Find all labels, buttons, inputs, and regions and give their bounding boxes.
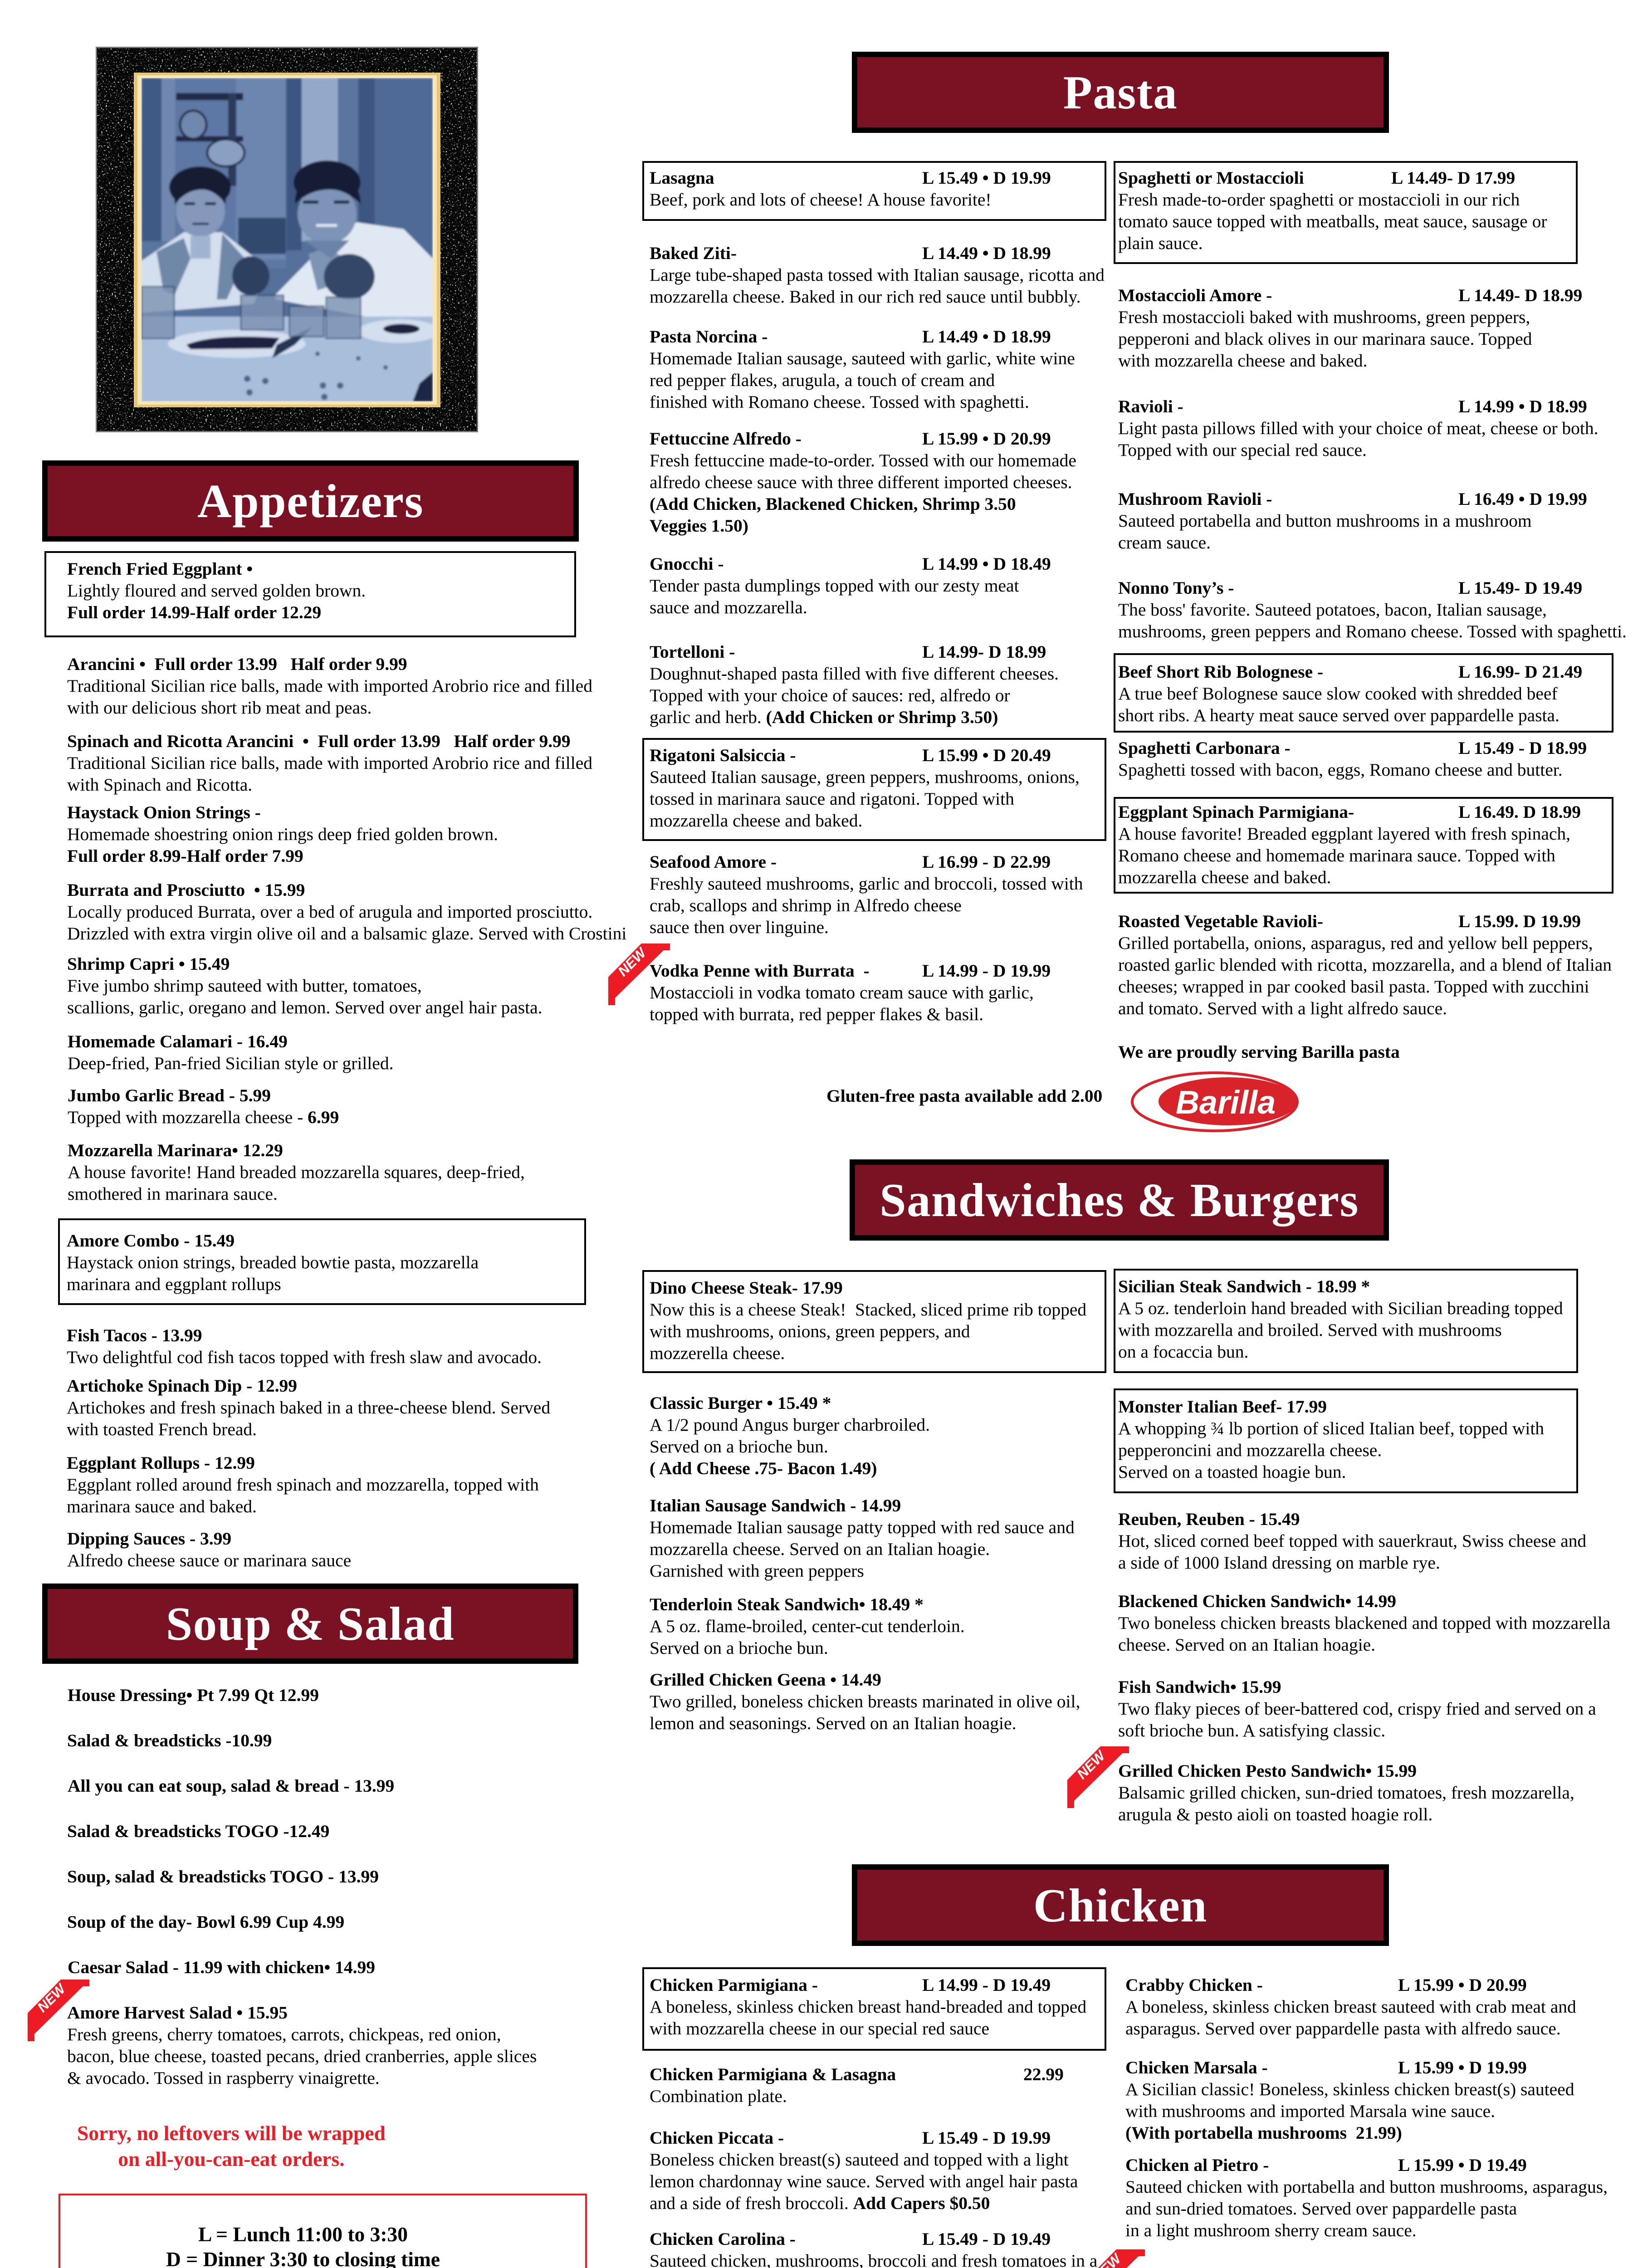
item: Amore Harvest Salad: bacon, blue cheese, toasted pecans, dried cranberries, apple slices — [67, 2046, 537, 2066]
item box: Amore Combo: Haystack onion strings, breaded bowtie pasta, mozzarella — [67, 1252, 479, 1272]
item: Grilled Chicken Pesto Sandwich: Balsamic grilled chicken, sun-dried tomatoes, fresh mozzarella, — [1118, 1783, 1574, 1803]
item box: Monster Italian Beef — [1114, 1388, 1578, 1493]
item: Chicken Piccata: Chicken Piccata - — [650, 2128, 784, 2148]
item box: Monster Italian Beef: Monster Italian Beef- 17.99 — [1118, 1397, 1327, 1417]
item: Chicken Carolina: L 15.49 - D 19.49 — [922, 2229, 1051, 2249]
item box: Eggplant Spinach Parmigiana — [1114, 797, 1613, 894]
item: Fettuccine Alfredo: Fresh fettuccine made-to-order. Tossed with our homemade — [650, 450, 1076, 470]
heading: Soup & Salad — [42, 1584, 578, 1664]
item box: Dino Cheese Steak: with mushrooms, onions, green peppers, and — [650, 1321, 970, 1341]
item: Spaghetti Carbonara: Spaghetti tossed with bacon, eggs, Romano cheese and butter. — [1118, 760, 1563, 780]
item: Chicken al Pietro: and sun-dried tomatoes. Served over pappardelle pasta — [1125, 2199, 1517, 2219]
item: Chicken Piccata: lemon chardonnay wine sauce. Served with angel hair pasta — [650, 2171, 1078, 2191]
item: Vodka Penne with Burrata — [650, 960, 1034, 1025]
item: Haystack Onion Strings: Haystack Onion Strings - — [67, 802, 261, 822]
icon: NEW ribbon — [1067, 1746, 1129, 1808]
heading: Appetizers — [42, 460, 579, 542]
icon: NEW ribbon — [1083, 2249, 1145, 2268]
item: Burrata and Prosciutto: Drizzled with extra virgin olive oil and a balsamic glaze. Served with Crostini — [67, 924, 626, 943]
item: Dipping Sauces — [67, 1528, 351, 1571]
panel: appetizers — [41, 460, 631, 1576]
item: Chicken Carolina: Chicken Carolina - — [650, 2229, 796, 2249]
callout: no leftovers notice — [54, 2120, 408, 2172]
item: Gnocchi: L 14.99 • D 18.49 — [922, 554, 1051, 574]
item: Mozzarella Marinara: smothered in marinara sauce. — [68, 1184, 278, 1204]
item: Shrimp Capri: Five jumbo shrimp sauteed with butter, tomatoes, — [67, 976, 422, 996]
item: Tortelloni: garlic and herb. (Add Chicken or Shrimp 3.50) — [650, 707, 998, 727]
item box: Rigatoni Salsiccia — [642, 738, 1106, 841]
item: Fettuccine Alfredo: Veggies 1.50) — [650, 516, 748, 536]
item: Fettuccine Alfredo — [650, 428, 1076, 537]
item: Italian Sausage Sandwich — [650, 1495, 1075, 1582]
item: Amore Harvest Salad — [67, 2002, 537, 2089]
text: lunch and dinner times: L = Lunch 11:00 to 3:30 — [198, 2223, 408, 2246]
item: Jumbo Garlic Bread: Jumbo Garlic Bread - 5.99 — [68, 1085, 271, 1105]
item box: Rigatoni Salsiccia: L 15.99 • D 20.49 — [922, 745, 1051, 765]
item: Spinach and Ricotta Arancini: Spinach and Ricotta Arancini • Full order 13.99 Half order 9.99 — [67, 731, 571, 751]
heading: Pasta: Pasta — [1063, 66, 1178, 119]
item: Roasted Vegetable Ravioli: Roasted Vegetable Ravioli- — [1118, 911, 1323, 931]
item box: Lasagna: Lasagna — [650, 168, 714, 188]
item box: Eggplant Spinach Parmigiana: mozzarella cheese and baked. — [1118, 867, 1331, 887]
item box: Dino Cheese Steak — [642, 1270, 1106, 1373]
item: Fish Sandwich: soft brioche bun. A satisfying classic. — [1118, 1721, 1385, 1740]
item: Vodka Penne with Burrata: L 14.99 - D 19.99 — [922, 961, 1051, 981]
item box: Monster Italian Beef: A whopping ¾ lb portion of sliced Italian beef, topped with — [1118, 1418, 1544, 1438]
item box: Rigatoni Salsiccia: tossed in marinara sauce and rigatoni. Topped with — [650, 789, 1014, 809]
item: Mushroom Ravioli: L 16.49 • D 19.99 — [1458, 489, 1587, 509]
item: Crabby Chicken: A boneless, skinless chicken breast sauteed with crab meat and — [1125, 1997, 1576, 2017]
item: Roasted Vegetable Ravioli: roasted garlic blended with ricotta, mozzarella, and a blend of Italian — [1118, 955, 1612, 975]
item: Eggplant Rollups: Eggplant Rollups - 12.99 — [67, 1453, 255, 1473]
item: Chicken Marsala: L 15.99 • D 19.99 — [1398, 2058, 1527, 2077]
item: Nonno Tony's: mushrooms, green peppers and Romano cheese. Tossed with spaghetti. — [1118, 621, 1627, 641]
item box: Spaghetti or Mostaccioli: Fresh made-to-order spaghetti or mostaccioli in our rich — [1118, 190, 1520, 210]
item: Blackened Chicken Sandwich: Blackened Chicken Sandwich• 14.99 — [1118, 1591, 1396, 1611]
item: Mostaccioli Amore: pepperoni and black olives in our marinara sauce. Topped — [1118, 329, 1532, 349]
item: Grilled Chicken Geena: lemon and seasonings. Served on an Italian hoagie. — [650, 1713, 1016, 1733]
item: Jumbo Garlic Bread — [68, 1085, 339, 1128]
item: Arancini — [67, 653, 592, 719]
item: Fish Sandwich: Fish Sandwich• 15.99 — [1118, 1677, 1281, 1697]
item: Spinach and Ricotta Arancini — [67, 730, 592, 796]
item box: Amore Combo — [58, 1218, 586, 1305]
item: Jumbo Garlic Bread: Topped with mozzarella cheese - 6.99 — [68, 1107, 339, 1127]
item: Crabby Chicken: L 15.99 • D 20.99 — [1398, 1975, 1527, 1995]
item: Tortelloni: Tortelloni - — [650, 642, 735, 662]
item: Chicken Piccata — [650, 2127, 1078, 2214]
item: Mostaccioli Amore: Fresh mostaccioli baked with mushrooms, green peppers, — [1118, 307, 1530, 327]
item box: Eggplant Spinach Parmigiana: L 16.49. D 18.99 — [1458, 802, 1581, 822]
item: Seafood Amore — [650, 851, 1083, 938]
item: Roasted Vegetable Ravioli: and tomato. Served with a light alfredo sauce. — [1118, 998, 1447, 1018]
item: Pasta Norcina: finished with Romano cheese. Tossed with spaghetti. — [650, 392, 1029, 412]
callout: no leftovers notice: Sorry, no leftovers will be wrapped — [77, 2121, 386, 2145]
item: Spaghetti Carbonara: L 15.49 - D 18.99 — [1458, 738, 1587, 758]
item: Tenderloin Steak Sandwich — [650, 1593, 965, 1659]
item: Blackened Chicken Sandwich — [1118, 1590, 1610, 1656]
item: Burrata and Prosciutto — [67, 879, 626, 944]
icon: NEW ribbon — [608, 943, 670, 1005]
item: Mushroom Ravioli: Mushroom Ravioli - — [1118, 489, 1272, 509]
item: Fettuccine Alfredo: alfredo cheese sauce with three different imported cheeses. — [650, 472, 1072, 492]
item box: Beef Short Rib Bolognese: short ribs. A hearty meat sauce served over pappardelle pasta. — [1118, 705, 1560, 725]
item: Tortelloni: Doughnut-shaped pasta filled with five different cheeses. — [650, 664, 1059, 684]
heading: Sandwiches & Burgers: Sandwiches & Burgers — [880, 1173, 1359, 1227]
item: Vodka Penne with Burrata: Mostaccioli in vodka tomato cream sauce with garlic, — [650, 982, 1034, 1002]
item: Blackened Chicken Sandwich: cheese. Served on an Italian hoagie. — [1118, 1635, 1375, 1655]
item: Fettuccine Alfredo: L 15.99 • D 20.99 — [922, 429, 1051, 449]
item: Mostaccioli Amore: with mozzarella cheese and baked. — [1118, 351, 1367, 371]
item: Mushroom Ravioli: Sauteed portabella and button mushrooms in a mushroom — [1118, 511, 1532, 531]
item box: Eggplant Spinach Parmigiana: Romano cheese and homemade marinara sauce. Topped with — [1118, 846, 1555, 865]
item: Mozzarella Marinara: Mozzarella Marinara• 12.29 — [68, 1140, 283, 1160]
item: Homemade Calamari — [68, 1031, 393, 1074]
item: Tortelloni: Topped with your choice of sauces: red, alfredo or — [650, 685, 1010, 705]
item box: Spaghetti or Mostaccioli: tomato sauce topped with meatballs, meat sauce, sausage or — [1118, 211, 1547, 231]
item: Pasta Norcina — [650, 326, 1075, 413]
item: Fish Tacos: Two delightful cod fish tacos topped with fresh slaw and avocado. — [67, 1347, 542, 1367]
item: Fish Tacos — [67, 1325, 542, 1368]
item: Chicken Piccata: L 15.49 - D 19.99 — [922, 2128, 1051, 2148]
item: Mushroom Ravioli: cream sauce. — [1118, 533, 1211, 552]
item: Amore Harvest Salad: Fresh greens, cherry tomatoes, carrots, chickpeas, red onion, — [67, 2024, 501, 2044]
item: Italian Sausage Sandwich: mozzarella cheese. Served on an Italian hoagie. — [650, 1539, 990, 1559]
item: Nonno Tony's: Nonno Tony’s - — [1118, 578, 1234, 598]
item: Chicken al Pietro: in a light mushroom sherry cream sauce. — [1125, 2220, 1417, 2240]
item: Amore Harvest Salad: Amore Harvest Salad • 15.95 — [67, 2003, 288, 2023]
item: Fish Sandwich — [1118, 1676, 1596, 1741]
item: Seafood Amore: Seafood Amore - — [650, 852, 777, 872]
item: Soup salad breadsticks togo: Soup, salad & breadsticks TOGO - 13.99 — [67, 1867, 379, 1887]
item: Shrimp Capri: Shrimp Capri • 15.49 — [67, 954, 230, 974]
icon: Barilla logo: Barilla — [1176, 1085, 1276, 1121]
item: Grilled Chicken Geena: Grilled Chicken Geena • 14.49 — [650, 1670, 881, 1690]
item: House Dressing: House Dressing• Pt 7.99 Qt 12.99 — [68, 1685, 319, 1705]
item: Eggplant Rollups: marinara sauce and baked. — [67, 1496, 257, 1516]
item: Chicken Piccata: and a side of fresh broccoli. Add Capers $0.50 — [650, 2193, 990, 2213]
item: Mozzarella Marinara — [68, 1139, 525, 1205]
item box: Dino Cheese Steak: Now this is a cheese Steak! Stacked, sliced prime rib topped — [650, 1300, 1086, 1320]
item: Spinach and Ricotta Arancini: with Spinach and Ricotta. — [67, 775, 252, 795]
panel: hours — [59, 2194, 587, 2268]
item box: Sicilian Steak Sandwich — [1114, 1269, 1578, 1373]
item: Artichoke Spinach Dip: with toasted French bread. — [67, 1419, 257, 1439]
item: Salad and breadsticks: Salad & breadsticks -10.99 — [67, 1730, 272, 1750]
item: Salad and breadsticks togo: Salad & breadsticks TOGO -12.49 — [67, 1821, 329, 1841]
item box: Eggplant Spinach Parmigiana: A house favorite! Breaded eggplant layered with fresh spinach, — [1118, 824, 1570, 844]
item box: Rigatoni Salsiccia: Rigatoni Salsiccia - — [650, 745, 796, 765]
item box: Chicken Parmigiana: with mozzarella cheese in our special red sauce — [650, 2019, 989, 2038]
item: Seafood Amore: sauce then over linguine. — [650, 917, 829, 937]
item: Roasted Vegetable Ravioli: L 15.99. D 19.99 — [1458, 911, 1581, 931]
panel: sandwiches and burgers — [640, 1159, 1628, 1831]
icon: NEW ribbon: NEW — [615, 944, 650, 979]
item box: Amore Combo: marinara and eggplant rollups — [67, 1274, 281, 1294]
item: Caesar Salad: Caesar Salad - 11.99 with chicken• 14.99 — [68, 1957, 375, 1977]
item box: Sicilian Steak Sandwich: with mozzarella and broiled. Served with mushrooms — [1118, 1320, 1502, 1340]
item box: Sicilian Steak Sandwich: on a focaccia bun. — [1118, 1342, 1248, 1362]
item: Italian Sausage Sandwich: Italian Sausage Sandwich - 14.99 — [650, 1496, 901, 1515]
item: Nonno Tony's: L 15.49- D 19.49 — [1458, 578, 1582, 598]
item: Homemade Calamari: Deep-fried, Pan-fried Sicilian style or grilled. — [68, 1053, 393, 1073]
item: Haystack Onion Strings: Full order 8.99-Half order 7.99 — [67, 846, 303, 866]
item: Pasta Norcina: L 14.49 • D 18.99 — [922, 327, 1051, 347]
item: Crabby Chicken: Crabby Chicken - — [1125, 1975, 1263, 1995]
item: Reuben, Reuben: Hot, sliced corned beef topped with sauerkraut, Swiss cheese and — [1118, 1531, 1586, 1551]
item box: Dino Cheese Steak: Dino Cheese Steak- 17.99 — [650, 1278, 843, 1298]
item: Classic Burger: ( Add Cheese .75- Bacon 1.49) — [650, 1458, 877, 1478]
item box: Rigatoni Salsiccia: mozzarella cheese and baked. — [650, 811, 862, 831]
item: Gnocchi: Tender pasta dumplings topped with our zesty meat — [650, 576, 1019, 596]
item: Blackened Chicken Sandwich: Two boneless chicken breasts blackened and topped with mozzarella — [1118, 1613, 1610, 1633]
item: Grilled Chicken Geena — [650, 1669, 1080, 1734]
item: Arancini: with our delicious short rib meat and peas. — [67, 698, 372, 718]
item: Tenderloin Steak Sandwich: Served on a brioche bun. — [650, 1638, 828, 1658]
item: Tenderloin Steak Sandwich: A 5 oz. flame-broiled, center-cut tenderloin. — [650, 1616, 965, 1636]
item: Chicken Parmigiana and Lasagna: Chicken Parmigiana & Lasagna — [650, 2064, 896, 2084]
item: Ravioli: Light pasta pillows filled with your choice of meat, cheese or both. — [1118, 418, 1599, 438]
item: Chicken Piccata: Boneless chicken breast(s) sauteed and topped with a light — [650, 2150, 1069, 2170]
item: Dipping Sauces: Alfredo cheese sauce or marinara sauce — [67, 1550, 351, 1570]
item: Homemade Calamari: Homemade Calamari - 16.49 — [68, 1031, 288, 1051]
item: Haystack Onion Strings — [67, 802, 498, 867]
item: Reuben, Reuben — [1118, 1508, 1586, 1574]
item: Amore Harvest Salad: & avocado. Tossed in raspberry vinaigrette. — [67, 2068, 380, 2088]
item: Crabby Chicken: asparagus. Served over pappardelle pasta with alfredo sauce. — [1125, 2019, 1561, 2038]
item: Tortelloni — [650, 641, 1059, 728]
item: Chicken Marsala: A Sicilian classic! Boneless, skinless chicken breast(s) sauteed — [1125, 2079, 1574, 2099]
item: Chicken Marsala: (With portabella mushrooms 21.99) — [1125, 2123, 1402, 2143]
item: Grilled Chicken Pesto Sandwich: Grilled Chicken Pesto Sandwich• 15.99 — [1118, 1761, 1417, 1781]
item: Pasta Norcina: Pasta Norcina - — [650, 327, 768, 347]
heading: Chicken — [852, 1864, 1389, 1946]
item box: French Fried Eggplant: French Fried Eggplant • — [67, 559, 253, 579]
item box: Chicken Parmigiana — [642, 1967, 1106, 2051]
item: Chicken Marsala: with mushrooms and imported Marsala wine sauce. — [1125, 2101, 1495, 2121]
item: Crabby Chicken — [1125, 1974, 1576, 2039]
icon: NEW ribbon: NEW — [1074, 1747, 1109, 1782]
item: Dipping Sauces: Dipping Sauces - 3.99 — [67, 1529, 231, 1549]
item box: Spaghetti or Mostaccioli: L 14.49- D 17.99 — [1391, 168, 1515, 188]
item box: Eggplant Spinach Parmigiana: Eggplant Spinach Parmigiana- — [1118, 802, 1354, 822]
item: Gnocchi: Gnocchi - — [650, 554, 724, 574]
item box: Lasagna — [642, 161, 1106, 221]
item box: Sicilian Steak Sandwich: Sicilian Steak Sandwich - 18.99 * — [1118, 1276, 1370, 1296]
item box: Beef Short Rib Bolognese: A true beef Bolognese sauce slow cooked with shredded beef — [1118, 684, 1558, 704]
item: Baked Ziti: L 14.49 • D 18.99 — [922, 243, 1051, 263]
item: Arancini: Arancini • Full order 13.99 Half order 9.99 — [67, 654, 407, 674]
item: Roasted Vegetable Ravioli — [1118, 910, 1612, 1019]
item: Artichoke Spinach Dip: Artichokes and fresh spinach baked in a three-cheese blend. Served — [67, 1398, 550, 1418]
item: Grilled Chicken Pesto Sandwich: arugula & pesto aioli on toasted hoagie roll. — [1118, 1804, 1433, 1824]
icon: Barilla logo — [1130, 1071, 1299, 1133]
item: Reuben, Reuben: Reuben, Reuben - 15.49 — [1118, 1509, 1300, 1529]
item: Seafood Amore: L 16.99 - D 22.99 — [922, 852, 1051, 872]
item box: Sicilian Steak Sandwich: A 5 oz. tenderloin hand breaded with Sicilian breading topped — [1118, 1298, 1563, 1318]
item box: Amore Combo: Amore Combo - 15.49 — [67, 1231, 235, 1251]
item: Chicken Parmigiana and Lasagna: Combination plate. — [650, 2086, 787, 2106]
item: Chicken al Pietro: L 15.99 • D 19.49 — [1398, 2155, 1527, 2175]
item: Italian Sausage Sandwich: Garnished with green peppers — [650, 1561, 864, 1581]
item box: French Fried Eggplant — [44, 551, 576, 637]
item: Italian Sausage Sandwich: Homemade Italian sausage patty topped with red sauce and — [650, 1517, 1075, 1537]
item box: Chicken Parmigiana: Chicken Parmigiana - — [650, 1975, 818, 1995]
panel: pasta — [608, 52, 1633, 1140]
item: Vodka Penne with Burrata: Vodka Penne with Burrata - — [650, 961, 870, 981]
item: Gnocchi: sauce and mozzarella. — [650, 597, 807, 617]
item: Chicken al Pietro — [1125, 2154, 1608, 2241]
photo: framed vintage portrait of a couple at dinner — [96, 47, 478, 432]
item: Shrimp Capri: scallions, garlic, oregano and lemon. Served over angel hair pasta. — [67, 997, 542, 1017]
panel: chicken — [640, 1864, 1628, 2268]
item: Chicken al Pietro: Chicken al Pietro - — [1125, 2155, 1269, 2175]
item: Spaghetti Carbonara: Spaghetti Carbonara - — [1118, 738, 1291, 758]
item: Nonno Tony's — [1118, 577, 1627, 642]
item: Haystack Onion Strings: Homemade shoestring onion rings deep fried golden brown. — [67, 824, 498, 844]
item box: Monster Italian Beef: pepperoncini and mozzarella cheese. — [1118, 1440, 1382, 1460]
item: Gnocchi — [650, 553, 1019, 618]
item: Spinach and Ricotta Arancini: Traditional Sicilian rice balls, made with imported Arobrio rice and filled — [67, 753, 592, 773]
item: Tenderloin Steak Sandwich: Tenderloin Steak Sandwich• 18.49 * — [650, 1594, 924, 1614]
item box: Spaghetti or Mostaccioli: Spaghetti or Mostaccioli — [1118, 168, 1304, 188]
heading: Pasta — [852, 52, 1389, 133]
item box: French Fried Eggplant: Full order 14.99-Half order 12.29 — [67, 602, 321, 622]
item box: Beef Short Rib Bolognese: L 16.99- D 21.49 — [1458, 662, 1582, 682]
item: Chicken Marsala: Chicken Marsala - — [1125, 2058, 1268, 2077]
item: Ravioli: Topped with our special red sauce. — [1118, 440, 1367, 460]
item: Baked Ziti: Baked Ziti- — [650, 243, 737, 263]
item box: Spaghetti or Mostaccioli — [1114, 161, 1578, 264]
item: Roasted Vegetable Ravioli: Grilled portabella, onions, asparagus, red and yellow bell peppers, — [1118, 933, 1593, 953]
item box: Chicken Parmigiana: L 14.99 - D 19.49 — [922, 1975, 1051, 1995]
item: Burrata and Prosciutto: Burrata and Prosciutto • 15.99 — [67, 880, 305, 900]
item: Fettuccine Alfredo: (Add Chicken, Blackened Chicken, Shrimp 3.50 — [650, 494, 1016, 514]
icon: NEW ribbon: NEW — [34, 1980, 69, 2015]
item box: Beef Short Rib Bolognese: Beef Short Rib Bolognese - — [1118, 662, 1323, 682]
item: Eggplant Rollups: Eggplant rolled around fresh spinach and mozzarella, topped with — [67, 1475, 539, 1495]
woman — [142, 166, 267, 313]
item: Baked Ziti: mozzarella cheese. Baked in our rich red sauce until bubbly. — [650, 287, 1081, 307]
item: Vodka Penne with Burrata: topped with burrata, red pepper flakes & basil. — [650, 1004, 983, 1024]
item: Classic Burger — [650, 1392, 930, 1479]
item: Chicken al Pietro: Sauteed chicken with portabella and button mushrooms, asparagus, — [1125, 2177, 1608, 2197]
item: Baked Ziti: Large tube-shaped pasta tossed with Italian sausage, ricotta and — [650, 265, 1105, 285]
panel: chicken: 22.99 — [1023, 2064, 1064, 2084]
item: Chicken Vesuvio — [1125, 2263, 1577, 2268]
note: gluten-free: Gluten-free pasta available add 2.00 — [826, 1086, 1102, 1106]
item: Mostaccioli Amore: L 14.49- D 18.99 — [1458, 285, 1582, 305]
item: Classic Burger: Classic Burger • 15.49 * — [650, 1393, 831, 1413]
item box: French Fried Eggplant: Lightly floured and served golden brown. — [67, 581, 366, 601]
item: Chicken Marsala — [1125, 2057, 1574, 2144]
item box: Monster Italian Beef: Served on a toasted hoagie bun. — [1118, 1462, 1346, 1482]
item: Eggplant Rollups — [67, 1452, 539, 1517]
item: Roasted Vegetable Ravioli: cheeses; wrapped in par cooked basil pasta. Topped with zucchini — [1118, 977, 1589, 997]
item box: Rigatoni Salsiccia: Sauteed Italian sausage, green peppers, mushrooms, onions, — [650, 767, 1080, 787]
note: Barilla pasta: We are proudly serving Barilla pasta — [1118, 1042, 1400, 1062]
item: Fish Tacos: Fish Tacos - 13.99 — [67, 1325, 202, 1345]
item: Ravioli: L 14.99 • D 18.99 — [1458, 396, 1587, 416]
item box: Spaghetti or Mostaccioli: plain sauce. — [1118, 233, 1203, 253]
item: Mostaccioli Amore: Mostaccioli Amore - — [1118, 285, 1272, 305]
table — [142, 287, 440, 401]
heading: Chicken: Chicken — [1033, 1879, 1208, 1931]
item: Arancini: Traditional Sicilian rice balls, made with imported Arobrio rice and filled — [67, 676, 592, 696]
item: Nonno Tony's: The boss' favorite. Sauteed potatoes, bacon, Italian sausage, — [1118, 600, 1547, 620]
item: Fish Sandwich: Two flaky pieces of beer-battered cod, crispy fried and served on a — [1118, 1699, 1596, 1719]
item: Seafood Amore: Freshly sauteed mushrooms, garlic and broccoli, tossed with — [650, 874, 1083, 894]
item: Soup of the day: Soup of the day- Bowl 6.99 Cup 4.99 — [67, 1912, 344, 1932]
item: Ravioli: Ravioli - — [1118, 396, 1183, 416]
item box: Beef Short Rib Bolognese — [1114, 653, 1613, 733]
heading: Appetizers: Appetizers — [197, 474, 424, 528]
item: Artichoke Spinach Dip — [67, 1375, 550, 1440]
item box: Chicken Parmigiana: A boneless, skinless chicken breast hand-breaded and topped — [650, 1997, 1086, 2017]
heading: Sandwiches & Burgers — [850, 1159, 1389, 1241]
item box: Lasagna: L 15.49 • D 19.99 — [922, 168, 1051, 188]
item box: Dino Cheese Steak: mozzerella cheese. — [650, 1343, 785, 1363]
item: Chicken Carolina — [650, 2228, 1097, 2268]
item: Shrimp Capri — [67, 953, 542, 1018]
text: lunch and dinner times — [60, 2222, 546, 2268]
item: Tortelloni: L 14.99- D 18.99 — [922, 642, 1046, 662]
item: Mushroom Ravioli — [1118, 488, 1532, 553]
item: Mostaccioli Amore — [1118, 284, 1532, 371]
item: Spaghetti Carbonara — [1118, 737, 1563, 781]
heading: Soup & Salad: Soup & Salad — [166, 1597, 455, 1650]
item box: Lasagna: Beef, pork and lots of cheese! A house favorite! — [650, 190, 992, 210]
item: Classic Burger: Served on a brioche bun. — [650, 1437, 828, 1457]
item: Artichoke Spinach Dip: Artichoke Spinach Dip - 12.99 — [67, 1376, 297, 1396]
callout: no leftovers notice: on all-you-can-eat orders. — [118, 2147, 345, 2170]
panel: soup and salad — [27, 1584, 590, 2182]
item: Mozzarella Marinara: A house favorite! Hand breaded mozzarella squares, deep-fried, — [68, 1162, 525, 1182]
item: Seafood Amore: crab, scallops and shrimp in Alfredo cheese — [650, 895, 962, 915]
item: Baked Ziti — [650, 242, 1105, 308]
item: Fettuccine Alfredo: Fettuccine Alfredo - — [650, 429, 802, 449]
man — [232, 161, 433, 319]
item: Ravioli — [1118, 396, 1599, 461]
item: Reuben, Reuben: a side of 1000 Island dressing on marble rye. — [1118, 1553, 1440, 1573]
item: Grilled Chicken Pesto Sandwich — [1118, 1760, 1574, 1825]
icon: NEW ribbon — [28, 1980, 89, 2041]
item: Classic Burger: A 1/2 pound Angus burger charbroiled. — [650, 1415, 930, 1435]
item: Pasta Norcina: Homemade Italian sausage, sauteed with garlic, white wine — [650, 348, 1075, 368]
item: Burrata and Prosciutto: Locally produced Burrata, over a bed of arugula and imported prosciutto. — [67, 902, 592, 922]
item: Pasta Norcina: red pepper flakes, arugula, a touch of cream and — [650, 370, 995, 390]
item: Chicken Parmigiana and Lasagna — [650, 2063, 896, 2107]
item: Grilled Chicken Geena: Two grilled, boneless chicken breasts marinated in olive oil, — [650, 1691, 1080, 1711]
item: All you can eat: All you can eat soup, salad & bread - 13.99 — [68, 1776, 394, 1796]
